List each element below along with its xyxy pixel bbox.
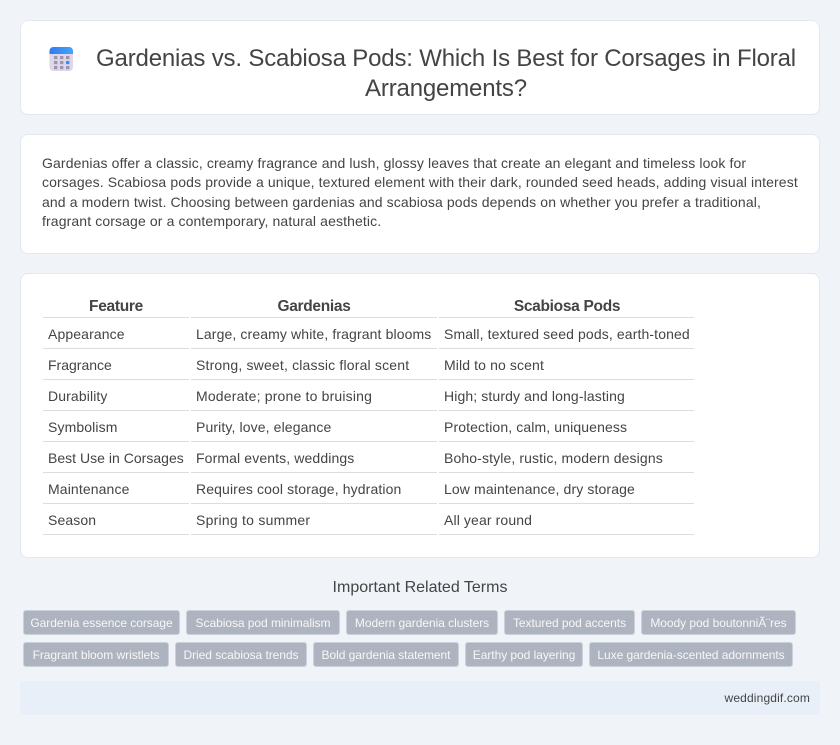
row: fragrance: Fragrance (48, 357, 112, 373)
intro text: and a modern twist. Choosing between gardenias and scabiosa pods depends on whether you prefer a traditional, (42, 194, 761, 210)
tag list: related terms: Bold gardenia statement (322, 648, 450, 662)
panel: comparison table: Formal events, weddings (196, 450, 354, 466)
panel: comparison table: High; sturdy and long-lasting (444, 388, 625, 404)
tag list: related terms: Luxe gardenia-scented adornments (597, 648, 785, 662)
tag list: related terms: Textured pod accents (513, 616, 626, 630)
title (96, 45, 796, 102)
tag list: related terms: Gardenia essence corsage (30, 616, 173, 630)
footer: source (20, 681, 820, 715)
row: season: Season (48, 512, 96, 528)
panel: comparison table: Requires cool storage, hydration (196, 481, 401, 497)
panel: comparison table: Gardenias (277, 298, 351, 315)
panel: comparison table: Low maintenance, dry storage (444, 481, 635, 497)
intro text (42, 155, 798, 229)
tag list: related terms: Earthy pod layering (473, 648, 575, 662)
table header: Feature (89, 298, 143, 315)
title: Gardenias vs. Scabiosa Pods: Which Is Best for Corsages in Floral (96, 45, 796, 72)
row: best use: Best Use in Corsages (48, 450, 184, 466)
panel: comparison table: Scabiosa Pods (514, 298, 620, 315)
intro text: Gardenias offer a classic, creamy fragrance and lush, glossy leaves that create an elegant and timeless look for (42, 155, 746, 171)
panel: comparison table: Moderate; prone to bruising (196, 388, 372, 404)
panel: comparison table: Spring to summer (196, 512, 310, 528)
tag list: related terms: Moody pod boutonniÃ¨res (650, 616, 787, 630)
intro text: corsages. Scabiosa pods provide a unique, textured element with their dark, rounded seed heads, adding visual interest (42, 174, 798, 190)
panel: comparison table: Small, textured seed pods, earth-toned (444, 326, 690, 342)
panel: comparison table: Strong, sweet, classic floral scent (196, 357, 409, 373)
panel: comparison table: Purity, love, elegance (196, 419, 331, 435)
panel: comparison table: All year round (444, 512, 532, 528)
panel: introduction (20, 134, 820, 254)
icon: calendar (50, 47, 73, 71)
panel: comparison table: Mild to no scent (444, 357, 544, 373)
panel: comparison table: Large, creamy white, fragrant blooms (196, 326, 431, 342)
panel: comparison table: Protection, calm, uniqueness (444, 419, 627, 435)
tag list: related terms (23, 610, 796, 667)
panel: title card (20, 20, 820, 115)
panel: comparison table (20, 273, 820, 558)
row: symbolism: Symbolism (48, 419, 118, 435)
heading: related terms: Important Related Terms (333, 579, 507, 596)
tag list: related terms: Scabiosa pod minimalism (196, 616, 330, 630)
panel: comparison table: Boho-style, rustic, modern designs (444, 450, 663, 466)
row: appearance: Appearance (48, 326, 125, 342)
tag list: related terms: Fragrant bloom wristlets (33, 648, 159, 662)
source text: weddingdif.com (725, 691, 810, 705)
tag list: related terms: Modern gardenia clusters (355, 616, 489, 630)
intro text: fragrant corsage or a contemporary, natural aesthetic. (42, 213, 381, 229)
title: Arrangements? (365, 75, 527, 102)
tag list: related terms: Dried scabiosa trends (183, 648, 298, 662)
row: durability: Durability (48, 388, 108, 404)
row: maintenance: Maintenance (48, 481, 130, 497)
